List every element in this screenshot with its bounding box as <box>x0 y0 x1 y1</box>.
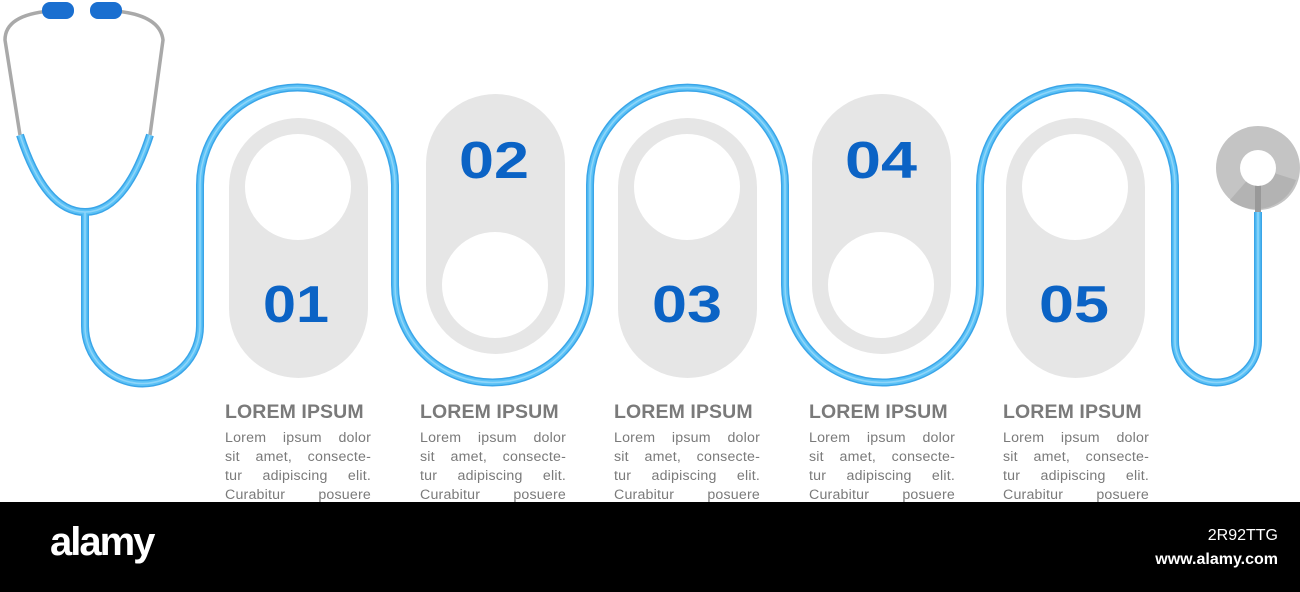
step 3 text: LOREM IPSUM <box>614 401 753 423</box>
step 5 body: tur adipiscing elit. <box>1003 468 1149 484</box>
step 5 body: Lorem ipsum dolor <box>1003 430 1149 446</box>
step 4 body: tur adipiscing elit. <box>809 468 955 484</box>
step 2 body: tur adipiscing elit. <box>420 468 566 484</box>
pills <box>229 94 1145 378</box>
step 3 body: sit amet, consecte- <box>614 449 760 465</box>
footer bar <box>0 502 1300 592</box>
stethoscope gray binaurals <box>5 11 163 135</box>
footer bar: www.alamy.com <box>1155 551 1278 568</box>
step 2 text: LOREM IPSUM <box>420 401 559 423</box>
tube <box>20 88 1258 383</box>
step 5 text: LOREM IPSUM <box>1003 401 1142 423</box>
step 1 body: Lorem ipsum dolor <box>225 430 371 446</box>
numbers: 01 <box>263 276 329 334</box>
step 2 body: sit amet, consecte- <box>420 449 566 465</box>
earpieces <box>42 2 122 19</box>
step 1 body: sit amet, consecte- <box>225 449 371 465</box>
step 4 text: LOREM IPSUM <box>809 401 948 423</box>
step 2 body: Lorem ipsum dolor <box>420 430 566 446</box>
step 1 text: LOREM IPSUM <box>225 401 364 423</box>
step 3 body <box>614 430 760 502</box>
step 2 body <box>420 430 566 502</box>
step 5 body <box>1003 430 1149 502</box>
step 4 body <box>809 430 955 502</box>
footer bar: 2R92TTG <box>1208 527 1278 544</box>
numbers <box>263 132 1109 334</box>
step 3 body: tur adipiscing elit. <box>614 468 760 484</box>
numbers: 04 <box>845 132 917 190</box>
numbers: 03 <box>652 276 722 334</box>
step 1 body <box>225 430 371 502</box>
step 1 body: tur adipiscing elit. <box>225 468 371 484</box>
step 4 body: sit amet, consecte- <box>809 449 955 465</box>
footer bar: alamy <box>50 520 153 564</box>
numbers: 02 <box>459 132 529 190</box>
step 3 body: Lorem ipsum dolor <box>614 430 760 446</box>
step 4 body: Lorem ipsum dolor <box>809 430 955 446</box>
numbers: 05 <box>1039 276 1109 334</box>
chestpiece <box>1216 126 1300 212</box>
step 5 body: sit amet, consecte- <box>1003 449 1149 465</box>
